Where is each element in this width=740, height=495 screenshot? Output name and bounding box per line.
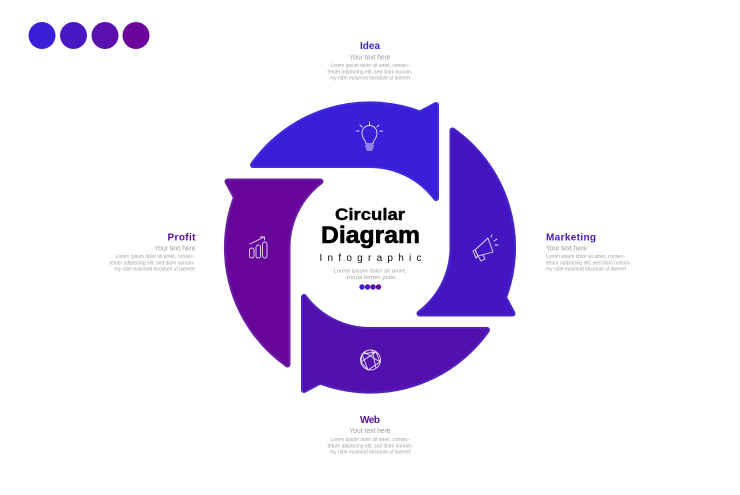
center dots [359,284,381,290]
heading: diagram: Diagram [321,222,420,249]
label: profit: Profit [168,232,196,244]
description: idea: Lorem ipsum dolor sit amet, consec- [330,63,410,69]
icon: bar chart [250,237,267,258]
segment: marketing arrow [420,130,513,314]
description: web: tetuer adipiscing elit, sed diam nonum- [328,444,413,450]
description: marketing: my nibh euismod tincidunt ut laoreet [546,266,627,272]
text block: idea [328,41,413,82]
description: profit: tetuer adipiscing elit, sed diam nonum- [110,260,195,266]
description: marketing: tetuer adipiscing elit, sed diam nonum- [546,260,631,266]
description: web [328,437,413,456]
description: profit [110,254,195,272]
label: web: Web [360,415,380,426]
label: marketing: Marketing [546,232,596,244]
segment: profit arrow [227,182,320,364]
subtitle: idea: Your text here [350,52,390,62]
description: marketing: Lorem ipsum dolor sit amet, consec- [546,254,625,260]
description: idea [328,63,413,82]
description: idea: my nibh euismod tincidunt ut laoreet [330,76,411,82]
subtitle: web: Your text here [350,426,390,435]
center description: morbi femen justo. [347,275,398,281]
label: idea: Idea [360,41,380,52]
subtitle: infographic: Infographic [320,253,422,264]
icon: light bulb [356,122,382,150]
description: profit: Lorem ipsum dolor sit amet, consec- [116,254,195,260]
text block: marketing [546,232,631,272]
legend dots [28,22,150,49]
description: profit: my nibh euismod tincidunt ut laoreet [114,266,195,272]
segment: idea arrow [253,104,436,198]
subtitle: marketing: Your text here [546,244,587,252]
description: web: Lorem ipsum dolor sit amet, consec- [330,437,410,443]
text block: profit [110,232,196,272]
center description: Lorem ipsum dolor sit amet, [334,268,407,274]
center title [320,205,422,281]
description: idea: tetuer adipiscing elit, sed diam nonum- [328,70,413,76]
subtitle: profit: Your text here [154,244,196,252]
icon: globe network [360,350,380,370]
center description [334,268,407,281]
icon: megaphone [473,235,498,261]
description: web: my nibh euismod tincidunt ut laoreet [330,450,411,456]
heading: circular: Circular [335,205,405,224]
segment: web arrow [304,297,487,391]
description: marketing [546,254,631,272]
text block: web [328,415,413,456]
